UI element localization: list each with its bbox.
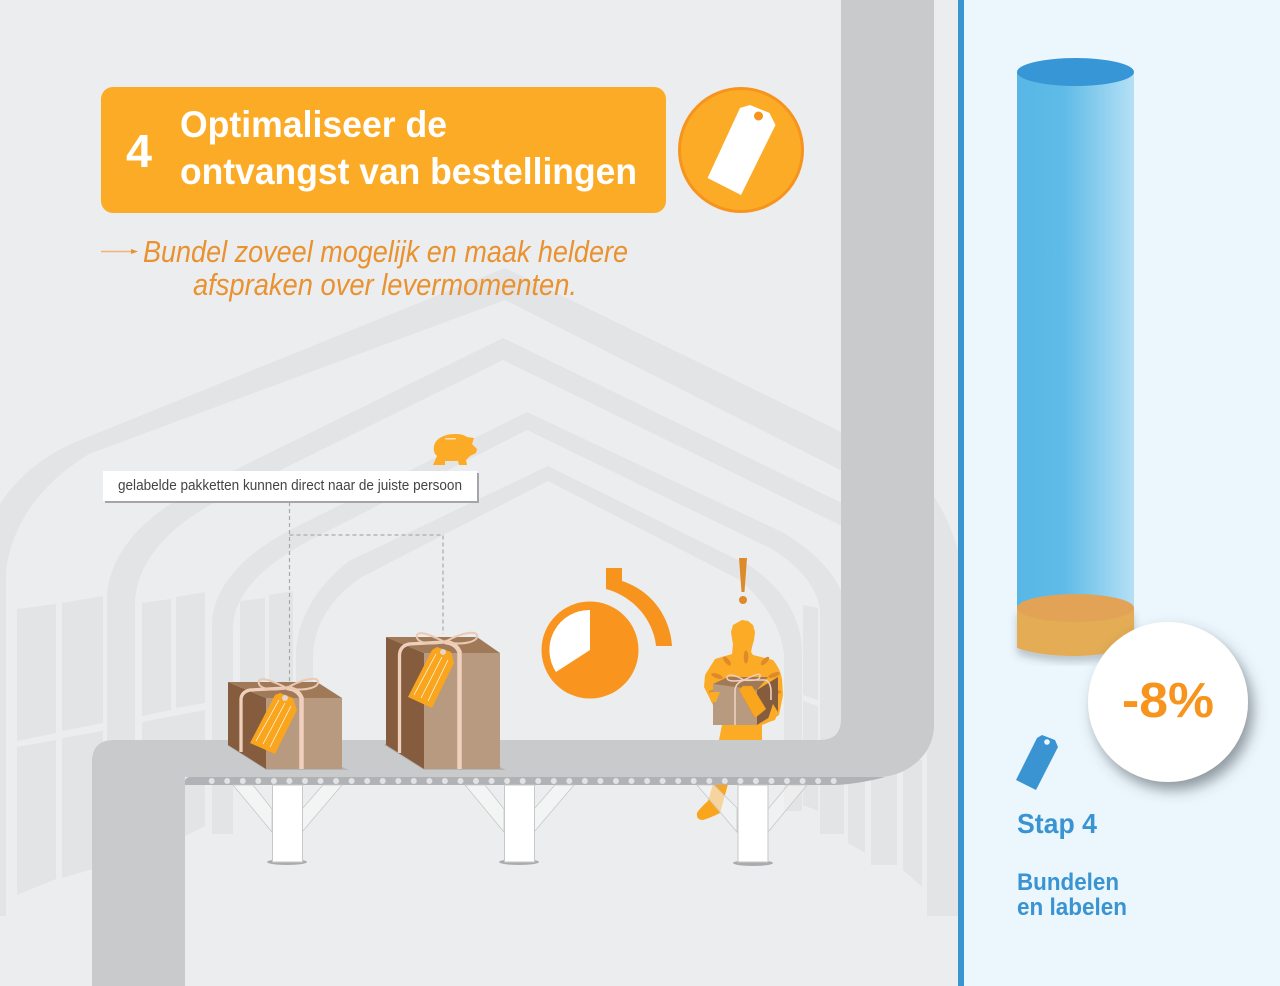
icon: piggy bank xyxy=(433,434,477,465)
panel divider xyxy=(958,0,964,986)
step label: Stap 4 xyxy=(1017,808,1097,839)
parcel 2 xyxy=(384,633,506,770)
person carrying parcel xyxy=(697,620,783,820)
cylinder body xyxy=(1017,72,1134,608)
exclamation mark xyxy=(739,558,747,604)
conveyor strip xyxy=(185,777,885,785)
windows: left xyxy=(17,596,103,895)
callout label: gelabelde pakketten kunnen direct naar de juiste persoon xyxy=(118,477,462,494)
arch: third xyxy=(212,412,844,834)
subtitle: Bundel zoveel mogelijk en maak heldere xyxy=(143,234,628,269)
windows: right xyxy=(803,605,922,887)
person thumb xyxy=(710,692,720,702)
step number: 4 xyxy=(126,125,152,177)
person leg and foot below belt xyxy=(697,784,728,820)
conveyor leg 3 xyxy=(697,785,807,866)
heading banner xyxy=(101,87,666,213)
ribbon xyxy=(400,642,445,753)
icon: stopwatch xyxy=(542,568,672,698)
arch: outer xyxy=(0,268,958,916)
title: Optimaliseer de xyxy=(180,104,447,145)
callout label xyxy=(103,471,479,503)
title: ontvangst van bestellingen xyxy=(180,151,637,192)
carried parcel tag xyxy=(739,686,766,718)
conveyor leg 1 xyxy=(233,785,342,865)
cylinder chart xyxy=(1017,58,1134,656)
percentage badge xyxy=(1088,622,1248,782)
subtitle: afspraken over levermomenten. xyxy=(193,267,577,302)
step description: en labelen xyxy=(1017,894,1127,921)
carried parcel xyxy=(757,677,778,725)
parcel 1 xyxy=(227,679,349,770)
icon: tag in circle xyxy=(680,88,802,212)
arch: second xyxy=(107,338,850,830)
step description: Bundelen xyxy=(1017,869,1119,896)
arrow xyxy=(101,249,138,254)
conveyor pipe xyxy=(92,0,934,986)
person body xyxy=(704,620,783,745)
parcel tag xyxy=(250,693,297,754)
ribbon xyxy=(241,688,287,752)
right panel xyxy=(964,0,1280,986)
windows: middle left xyxy=(142,592,205,836)
arch: fourth xyxy=(296,466,802,811)
conveyor rollers xyxy=(209,778,837,784)
parcel tag xyxy=(408,647,454,708)
icon: blue tag xyxy=(1016,735,1058,790)
warehouse background xyxy=(0,268,958,916)
windows: centre left xyxy=(240,591,293,745)
dashed connector lines xyxy=(290,502,443,682)
conveyor leg 2 xyxy=(465,785,574,865)
percentage badge: -8% xyxy=(1122,674,1214,728)
person muscle marks xyxy=(709,650,781,694)
cylinder top xyxy=(1017,58,1134,86)
reduced share segment xyxy=(1017,594,1134,656)
person hand xyxy=(757,704,778,725)
